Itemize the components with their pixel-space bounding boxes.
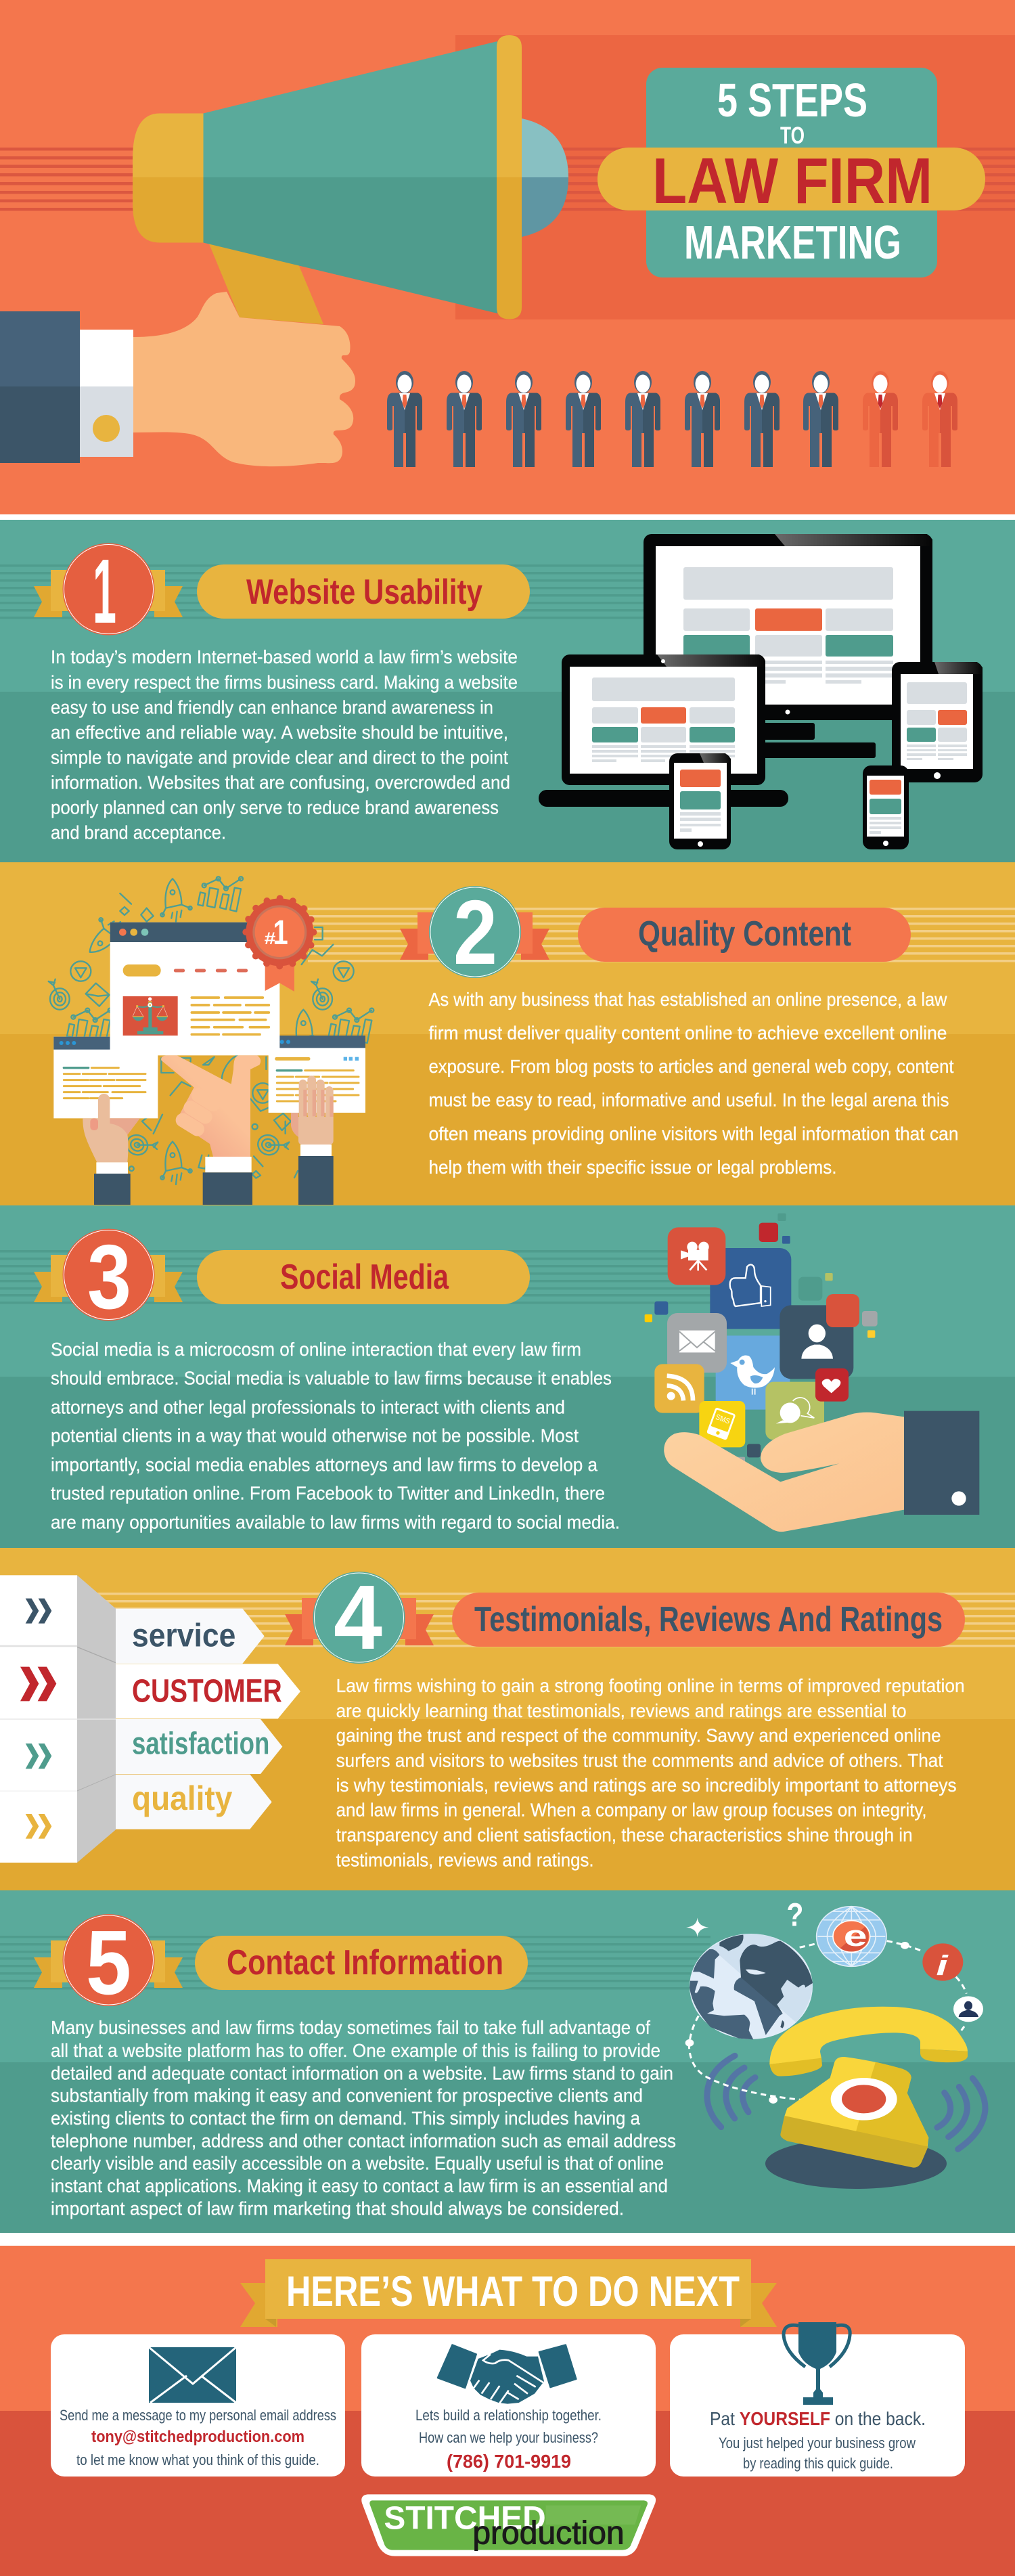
text block: step 4: gaining the trust and respect of the community. Savvy and experienced online bbox=[336, 1725, 941, 1746]
icon: social media apps over hand bbox=[645, 1214, 979, 1532]
illustration: web pages held by hands bbox=[49, 876, 374, 1205]
text block: step 4: are quickly learning that testimonials, reviews and ratings are essential to bbox=[336, 1700, 907, 1721]
text block: step 4: Law firms wishing to gain a strong footing online in terms of improved reputation bbox=[336, 1675, 965, 1696]
panel: right page bbox=[269, 1036, 365, 1113]
text block: step 1: simple to navigate and provide clear and direct to the point bbox=[51, 747, 508, 768]
card: phone: How can we help your business? bbox=[419, 2429, 598, 2446]
icon: twitter bird bbox=[716, 1335, 790, 1410]
badge: number 2: 2 bbox=[453, 881, 497, 983]
tag: service: service bbox=[132, 1618, 235, 1654]
text block: step 4: and law firms in general. When a company or law group focuses on integrity, bbox=[336, 1800, 927, 1821]
text block: step 1: poorly planned can only serve to reduce brand awareness bbox=[51, 797, 499, 818]
icon: hand with cuff bbox=[0, 292, 355, 466]
icon: rosette number one: # bbox=[265, 929, 275, 948]
text block: step 3: potential clients in a way that would otherwise not be possible. Most bbox=[51, 1425, 579, 1446]
text block: step 3: are many opportunities available to law firms with regard to social media. bbox=[51, 1511, 620, 1532]
card: phone: Lets build a relationship together. bbox=[415, 2407, 602, 2424]
text block: step 3: should embrace. Social media is valuable to law firms because it enables bbox=[51, 1368, 612, 1389]
badge: number 5: 5 bbox=[86, 1911, 131, 2014]
heading: website usability bbox=[197, 564, 530, 619]
tag: quality: quality bbox=[132, 1779, 233, 1817]
icon: large globe bbox=[690, 1934, 813, 2039]
people row bbox=[387, 371, 957, 467]
card: phone: (786) 701-9919 bbox=[447, 2451, 571, 2472]
text block: step 3 bbox=[51, 1339, 620, 1532]
tag: satisfaction: satisfaction bbox=[132, 1726, 269, 1761]
icon: telephone bbox=[769, 2007, 968, 2168]
icon: cuff bbox=[904, 1411, 979, 1515]
text block: step 3: importantly, social media enables attorneys and law firms to develop a bbox=[51, 1454, 598, 1475]
tag: service bbox=[116, 1609, 265, 1664]
card: email: to let me know what you think of this guide. bbox=[76, 2451, 319, 2468]
text block: step 2 bbox=[429, 989, 958, 1178]
text block: step 1 bbox=[51, 646, 518, 843]
icon: laptop bbox=[539, 654, 788, 807]
text block: step 5: all that a website platform has to offer. One example of this is failing to provide bbox=[51, 2040, 660, 2061]
card: email: Send me a message to my personal email address bbox=[60, 2407, 336, 2424]
text block: step 5: important aspect of law firm marketing that should always be considered. bbox=[51, 2198, 624, 2219]
icon: facebook like bbox=[710, 1248, 791, 1329]
icon: handshake bbox=[438, 2345, 577, 2404]
tag: satisfaction bbox=[116, 1719, 282, 1774]
heading: social media bbox=[197, 1250, 530, 1304]
text block: step 1: easy to use and friendly can enhance brand awareness in bbox=[51, 696, 493, 717]
panel: next steps footer bbox=[0, 2246, 1015, 2576]
tag: quality bbox=[116, 1775, 272, 1829]
text block: step 5 bbox=[51, 2017, 676, 2219]
card: email: tony@stitchedproduction.com bbox=[91, 2428, 304, 2446]
banner: here's what to do next: HERE’S WHAT TO DO NEXT bbox=[286, 2268, 740, 2315]
tag: customer: CUSTOMER bbox=[132, 1673, 282, 1709]
icon: question mark: ? bbox=[786, 1896, 803, 1933]
text block: step 3: trusted reputation online. From Facebook to Twitter and LinkedIn, there bbox=[51, 1483, 605, 1504]
text block: step 5: substantially from making it easy and convenient for prospective clients and bbox=[51, 2085, 643, 2106]
heading: quality content bbox=[578, 908, 911, 962]
heading: testimonials bbox=[452, 1593, 965, 1647]
card: phone bbox=[361, 2334, 656, 2477]
panel: step 3 social media bbox=[0, 1205, 1015, 1548]
icon: desktop monitor bbox=[644, 534, 932, 758]
icon: e globe: e bbox=[844, 1920, 867, 1953]
icon: envelope bbox=[149, 2347, 236, 2403]
icon: rosette number one: 1 bbox=[273, 913, 288, 952]
banner: here's what to do next bbox=[240, 2259, 777, 2327]
badge: number 3 bbox=[34, 1226, 183, 1328]
doodles bbox=[49, 876, 374, 1184]
text block: step 5: clearly visible and easily accessible on a website. Equally useful is that of online bbox=[51, 2153, 664, 2174]
logo: stitched production: production bbox=[472, 2515, 625, 2551]
text block: step 5: existing clients to contact the firm on demand. This simply includes having a bbox=[51, 2108, 641, 2129]
badge: number 3: 3 bbox=[87, 1226, 131, 1328]
tag: customer bbox=[116, 1664, 300, 1718]
text block: step 2: must be easy to read, informative and useful. In the legal arena this bbox=[429, 1090, 949, 1111]
card: trophy: by reading this quick guide. bbox=[743, 2455, 893, 2472]
text block: step 3: Social media is a microcosm of online interaction that every law firm bbox=[51, 1339, 581, 1360]
icon: chat bbox=[765, 1382, 824, 1440]
text block: step 4: surfers and visitors to websites trust the comments and advice of others. That bbox=[336, 1750, 943, 1771]
badge: number 4: 4 bbox=[334, 1566, 382, 1668]
icon: rss bbox=[654, 1364, 704, 1413]
badge: number 4 bbox=[285, 1566, 434, 1668]
heading: social media: Social Media bbox=[280, 1258, 449, 1297]
icon: middle hand bbox=[161, 1055, 261, 1205]
logo: stitched production bbox=[361, 2494, 656, 2556]
text block: step 1: is in every respect the firms business card. Making a website bbox=[51, 671, 518, 692]
text block: step 2: firm must deliver quality content online to achieve excellent online bbox=[429, 1023, 947, 1044]
text block: step 5: telephone number, address and other contact information such as email address bbox=[51, 2130, 676, 2151]
text block: step 5: Many businesses and law firms today sometimes fail to take full advantage of bbox=[51, 2017, 650, 2038]
icon: left hand bbox=[83, 1094, 140, 1205]
card: trophy: Pat YOURSELF on the back. bbox=[710, 2408, 926, 2429]
icon: telephone shadow bbox=[765, 2138, 947, 2189]
background: header bbox=[0, 0, 1015, 514]
illustration: telephone and globe bbox=[685, 1896, 985, 2189]
badge: number 5 bbox=[34, 1911, 183, 2014]
icon: rosette number one bbox=[246, 898, 313, 992]
icon: scales of justice bbox=[123, 996, 178, 1036]
text block: step 3: attorneys and other legal professionals to interact with clients and bbox=[51, 1396, 565, 1417]
panel: step 2 quality content bbox=[0, 862, 1015, 1205]
card: trophy bbox=[670, 2322, 965, 2477]
badge: number 1: 1 bbox=[93, 540, 116, 642]
icon: heart bbox=[815, 1369, 849, 1402]
text block: step 1: information. Websites that are confusing, overcrowded and bbox=[51, 772, 510, 793]
chart: step column with tags bbox=[0, 1575, 300, 1863]
card: email bbox=[51, 2334, 345, 2477]
text block: step 4: testimonials, reviews and ratings. bbox=[336, 1849, 594, 1870]
icon: right hand bbox=[291, 1075, 334, 1205]
text block: step 1: an effective and reliable way. A website should be intuitive, bbox=[51, 721, 508, 742]
title block: MARKETING bbox=[684, 216, 901, 269]
icon: sms: SMS bbox=[715, 1413, 731, 1426]
text block: step 4: is why testimonials, reviews and ratings are so incredibly important to attorneys bbox=[336, 1775, 957, 1796]
panel: step 4 testimonials bbox=[0, 1548, 1015, 1890]
icon: phone B bbox=[863, 765, 909, 849]
text block: step 2: help them with their specific issue or legal problems. bbox=[429, 1157, 836, 1178]
title block: 5 STEPS bbox=[717, 74, 867, 127]
title block: TO bbox=[780, 123, 805, 149]
chevrons bbox=[20, 1599, 56, 1839]
icon: sparkle bbox=[686, 1917, 708, 1937]
icon: info bbox=[922, 1943, 963, 1981]
icon: contact person bbox=[780, 1305, 853, 1379]
icon: megaphone bbox=[133, 35, 568, 324]
heading: website usability: Website Usability bbox=[246, 573, 482, 612]
icon: sound waves bbox=[707, 2056, 985, 2149]
panel: step 5 contact information bbox=[0, 1890, 1015, 2233]
text block: step 1: In today’s modern Internet-based world a law firm’s website bbox=[51, 646, 518, 667]
text block: step 5: instant chat applications. Making it easy to contact a law firm is an essential and bbox=[51, 2175, 668, 2196]
panel: main page bbox=[110, 923, 279, 1055]
text block: step 2: often means providing online visitors with legal information that can bbox=[429, 1123, 958, 1144]
text block: step 4 bbox=[336, 1675, 965, 1870]
heading: contact information: Contact Information bbox=[227, 1943, 503, 1982]
icon: phone A bbox=[669, 753, 731, 849]
panel: left page bbox=[53, 1037, 158, 1118]
icon: sms bbox=[699, 1401, 745, 1447]
heading: quality content: Quality Content bbox=[638, 914, 851, 954]
card: trophy: You just helped your business grow bbox=[719, 2435, 916, 2451]
icon: responsive devices bbox=[539, 534, 983, 849]
badge: number 1 bbox=[34, 540, 183, 642]
title block bbox=[597, 68, 985, 277]
icon: open hand bbox=[664, 1413, 904, 1532]
icon: mail bbox=[667, 1313, 727, 1373]
icon: trophy bbox=[784, 2322, 850, 2405]
text block: step 5: detailed and adequate contact information on a website. Law firms stand to gain bbox=[51, 2062, 673, 2083]
panel: header art bbox=[0, 35, 1015, 467]
logo: stitched production: STITCHED bbox=[384, 2500, 546, 2537]
icon: tablet bbox=[892, 662, 983, 782]
icon: info: i bbox=[936, 1949, 949, 1981]
icon: e globe bbox=[817, 1907, 886, 1966]
badge: number 2 bbox=[400, 881, 549, 983]
title block: LAW FIRM bbox=[652, 145, 932, 217]
dashed connector bbox=[685, 1941, 966, 2104]
text block: step 1: and brand acceptance. bbox=[51, 822, 226, 843]
heading: contact information bbox=[195, 1936, 528, 1990]
text block: step 4: transparency and client satisfaction, these characteristics shine through in bbox=[336, 1825, 913, 1846]
icon: video camera bbox=[668, 1227, 725, 1285]
text block: step 2: As with any business that has established an online presence, a law bbox=[429, 989, 947, 1010]
icon: person bbox=[953, 1996, 983, 2022]
text block: step 2: exposure. From blog posts to articles and general web copy, content bbox=[429, 1056, 954, 1077]
panel: step 1 website usability bbox=[0, 520, 1015, 862]
